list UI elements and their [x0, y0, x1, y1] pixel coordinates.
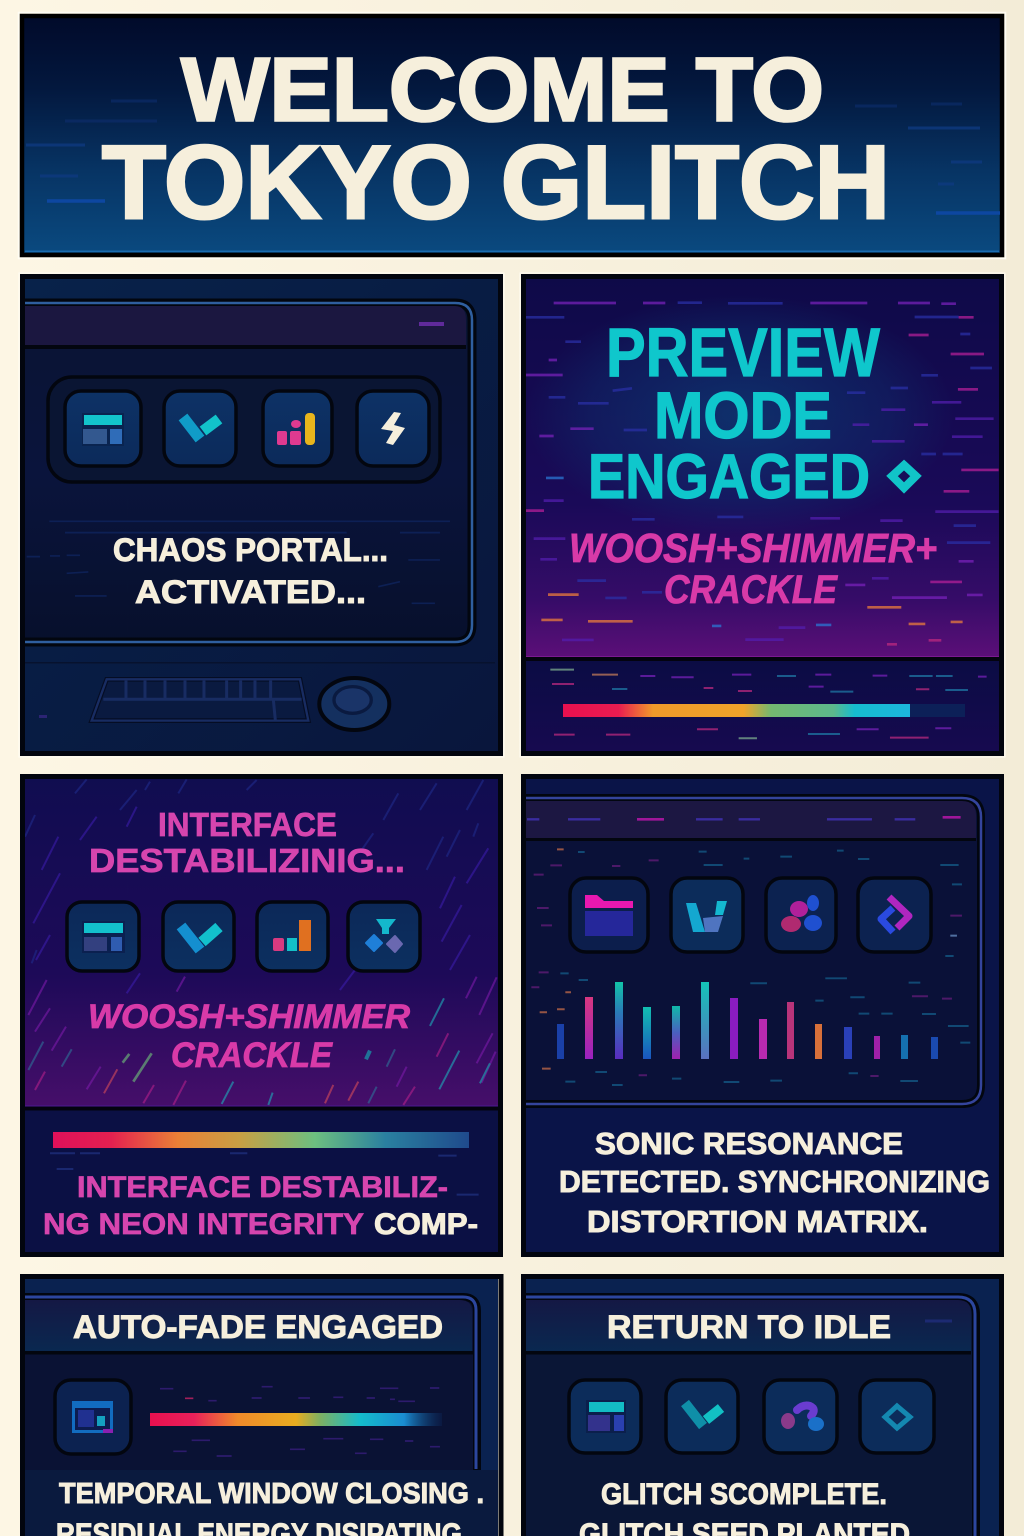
residual dashes [160, 1387, 440, 1456]
status text: SONIC RESONANCE [595, 1126, 903, 1161]
heading: AUTO-FADE ENGAGED [73, 1309, 443, 1345]
status text [579, 1478, 910, 1536]
icon: blobs [766, 878, 836, 952]
glitch dashes [526, 303, 999, 738]
panel border: sonic resonance [524, 776, 1002, 1254]
sound caption [571, 533, 937, 604]
bottom strip dashes [640, 675, 987, 729]
faint glitch lines [27, 521, 450, 603]
heading: DESTABILIZINIG... [89, 842, 405, 879]
heading: RETURN TO IDLE [607, 1309, 891, 1345]
heading: MODE [654, 378, 832, 452]
icon row [570, 878, 931, 952]
heading: INTERFACE [158, 806, 337, 843]
icon: shapes [348, 902, 420, 971]
icon: diamond [892, 465, 916, 488]
panel border: interface destabilizing [22, 776, 500, 1254]
title bar dashes and scattered glitch [527, 817, 970, 1085]
icon: diamond [860, 1380, 934, 1453]
sound caption: CRACKLE [171, 1036, 334, 1075]
sound caption [90, 1004, 410, 1068]
icon: code diamond [858, 878, 931, 952]
status text: ACTIVATED... [135, 574, 366, 610]
window frame [521, 798, 981, 1104]
icon: layout [569, 1380, 641, 1453]
icon: lightning [357, 391, 429, 466]
window frame [521, 1297, 976, 1536]
progress bar [563, 704, 965, 717]
status text: DISTORTION MATRIX. [587, 1204, 928, 1239]
icon: check [666, 1380, 738, 1453]
panel: auto-fade [20, 1274, 503, 1536]
heading: PREVIEW [606, 314, 881, 391]
panel border: auto-fade [22, 1276, 501, 1536]
diagonal rain [25, 779, 497, 1105]
status text: COMP- [374, 1208, 478, 1241]
panel border: return to idle [524, 1276, 1002, 1536]
icon tray [48, 377, 440, 482]
panel border: preview mode [520, 273, 1005, 757]
panel: interface destabilizing [20, 774, 503, 1257]
status text [56, 1478, 484, 1536]
header panel: title banner [18, 12, 1006, 258]
progress bar [53, 1132, 469, 1148]
window frame [20, 1297, 498, 1536]
status text: CHAOS PORTAL... [113, 532, 388, 568]
icon: check [163, 902, 234, 971]
icon: abstract check [671, 878, 743, 952]
status text: DETECTED. SYNCHRONIZING [559, 1164, 990, 1199]
window frame [20, 303, 472, 642]
icon: bar chart [257, 902, 328, 971]
sound caption: WOOSH+SHIMMER+ [569, 525, 937, 571]
icon: check [164, 391, 236, 466]
status text [44, 1176, 478, 1235]
progress bar [150, 1413, 442, 1426]
status text: GLITCH SCOMPLETE. [601, 1478, 887, 1511]
glow behind heading [558, 314, 922, 516]
panel border: chaos portal [19, 273, 504, 757]
status text: INTERFACE DESTABILIZ- [77, 1171, 448, 1204]
panel: sonic resonance [521, 774, 1004, 1257]
sound caption: CRACKLE [664, 568, 838, 612]
icon: layout [65, 391, 141, 466]
panel: return to idle [521, 1274, 1004, 1536]
panel: preview mode [521, 274, 1004, 756]
panel: chaos portal [20, 274, 503, 756]
icon: arc blobs [764, 1380, 837, 1453]
heading [91, 812, 403, 873]
title: TOKYO GLITCH [102, 125, 890, 241]
status text: TEMPORAL WINDOW CLOSING . [59, 1478, 484, 1510]
icon: layout [67, 902, 139, 971]
icon: bar chart [263, 391, 332, 466]
keyboard [92, 679, 308, 721]
title [102, 40, 890, 241]
icon row [569, 1380, 934, 1453]
sound caption: WOOSH+SHIMMER [88, 998, 410, 1036]
icon: folder [570, 878, 648, 952]
icon: window [55, 1380, 131, 1454]
status text: NG NEON INTEGRITY [43, 1208, 364, 1241]
icon row [67, 902, 420, 971]
trackball [319, 678, 389, 730]
heading [591, 328, 880, 500]
heading: ENGAGED [588, 442, 870, 512]
status text [114, 538, 386, 604]
title: WELCOME TO [181, 40, 824, 140]
equalizer bars [557, 982, 938, 1059]
status text [560, 1132, 989, 1233]
